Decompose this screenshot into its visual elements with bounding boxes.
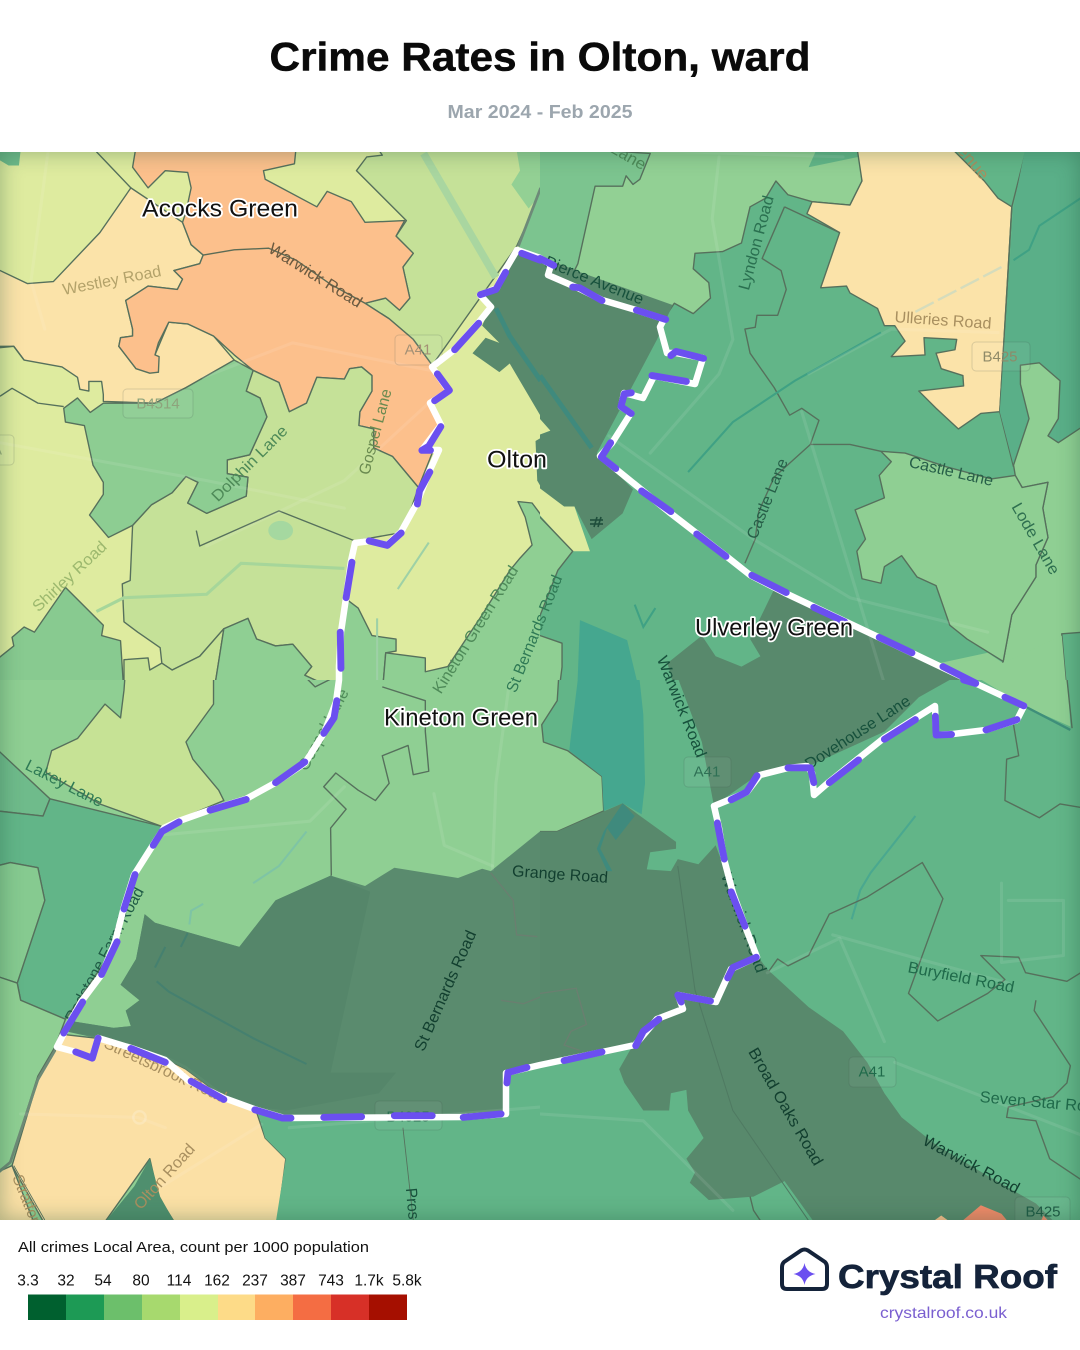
road labels: St Bernards Road	[504, 573, 566, 695]
place labels: Acocks Green	[142, 196, 298, 222]
road labels: Warwick Road	[265, 240, 365, 312]
title: Crime Rates in Olton, ward	[270, 36, 810, 80]
road labels: Lane	[607, 140, 649, 174]
road number shields	[0, 335, 1070, 1226]
legend values: 114	[167, 1272, 192, 1290]
legend colour bar	[28, 1294, 407, 1320]
legend values: 1.7k	[354, 1272, 384, 1290]
road labels: Dolphin Lane	[209, 423, 291, 505]
road labels: Redstone Farm Road	[62, 885, 148, 1025]
map regions south-east	[537, 673, 1080, 1224]
road labels: Pierce Avenue	[542, 253, 646, 309]
road labels: Kineton Green Road	[430, 563, 522, 697]
road labels: Lode Lane	[1008, 500, 1062, 578]
road labels: Ulleries Road	[894, 309, 992, 333]
legend values: 5.8k	[392, 1272, 422, 1290]
legend values: 743	[318, 1272, 344, 1290]
map regions north-west	[0, 147, 548, 694]
ward boundary: white line with purple dashes	[57, 250, 1024, 1118]
website url: crystalroof.co.uk	[880, 1305, 1008, 1322]
road number shields: B4514	[136, 396, 180, 412]
road labels: St Bernards Road	[412, 928, 480, 1054]
legend values: 80	[132, 1272, 150, 1290]
legend values: 54	[94, 1272, 112, 1290]
legend values: 237	[242, 1272, 268, 1290]
road labels: Stratford Road	[8, 1172, 62, 1272]
road number shields: B4025	[386, 1108, 430, 1126]
road number shields: A41	[694, 764, 720, 780]
map regions north-east	[533, 147, 1080, 700]
legend values: 387	[280, 1272, 306, 1290]
road labels: Gospel Lane	[356, 387, 396, 477]
road labels: Prospect	[402, 1187, 424, 1249]
logo: Crystal Roof	[782, 1250, 1058, 1322]
legend values	[17, 1272, 422, 1290]
road labels: Grange Road	[512, 863, 608, 887]
legend: crime rate colour scale	[17, 1239, 422, 1320]
place labels: Olton	[487, 446, 547, 474]
map regions south-west	[0, 666, 544, 1224]
icon: house with star	[782, 1250, 827, 1289]
road labels: Castle Lane	[744, 456, 792, 542]
road number shields: B425	[1025, 1204, 1061, 1220]
place labels	[142, 196, 853, 732]
road labels: Gospel Lane	[295, 686, 353, 774]
icon: railway station	[590, 517, 603, 527]
road labels: Olton Road	[131, 1141, 199, 1213]
place labels: Kineton Green	[384, 704, 538, 732]
road labels: Westley Road	[61, 263, 163, 299]
road number shields: B425	[982, 348, 1018, 366]
road labels: Shirley Road	[29, 538, 111, 616]
subtitle: date range: Mar 2024 - Feb 2025	[448, 102, 632, 122]
legend title: All crimes Local Area, count per 1000 population	[18, 1239, 369, 1256]
road labels: Warwick Road	[653, 654, 709, 760]
road labels: Streetsbrook Road	[101, 1035, 229, 1107]
legend values: 32	[57, 1272, 75, 1290]
place labels: Ulverley Green	[695, 614, 853, 642]
road labels: Dovehouse Lane	[802, 693, 914, 773]
road labels: Lakey Lane	[22, 757, 106, 811]
logo wordmark: Crystal Roof	[838, 1258, 1058, 1295]
road labels: Warwick Road	[920, 1132, 1022, 1198]
road labels: Castle Lane	[907, 454, 995, 490]
road labels: Buryfield Road	[906, 959, 1016, 997]
road number shields: A41	[405, 342, 431, 358]
road labels: Warwick Road	[717, 871, 769, 975]
road labels: Avenue	[940, 127, 992, 184]
legend values: 162	[204, 1272, 230, 1290]
road labels: Broad Oaks Road	[744, 1045, 826, 1169]
road number shields: A41	[859, 1064, 885, 1080]
legend values: 3.3	[17, 1272, 39, 1290]
road labels: Lyndon Road	[736, 194, 778, 292]
